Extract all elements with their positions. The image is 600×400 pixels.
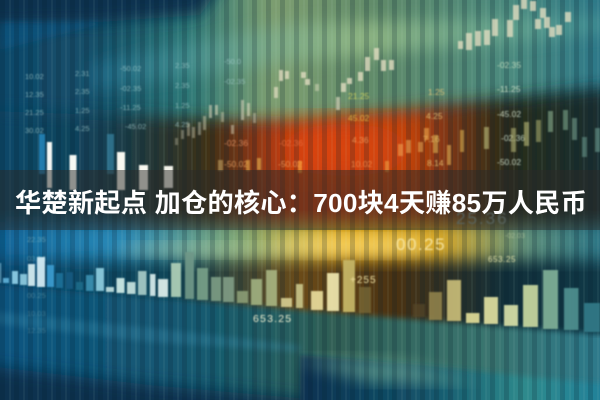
chart labels: floating numbers: 21.25 xyxy=(25,108,44,117)
title: 华楚新起点 加仓的核心：700块4天赚85万人民币 xyxy=(15,188,587,218)
chart labels: warm numbers: 4.25 xyxy=(426,111,443,121)
small candlesticks: rising series xyxy=(175,0,571,145)
numeric labels: lower chart: 653.25 xyxy=(253,313,292,325)
chart labels: warm numbers: -11.25 xyxy=(497,84,521,94)
title strip xyxy=(0,170,600,230)
chart labels: warm numbers: -50.02 xyxy=(497,157,521,167)
chart labels: warm numbers: -02.36 xyxy=(224,138,248,148)
chart labels: warm numbers: -02.36 xyxy=(279,138,303,148)
chart labels: warm numbers: -50.02 xyxy=(278,159,302,169)
chart labels: floating numbers: 12.35 xyxy=(27,326,46,335)
chart labels: floating numbers: -02.35 xyxy=(120,84,141,93)
chart labels: warm numbers: 1.25 xyxy=(428,87,445,97)
chart labels: floating numbers: 12.35 xyxy=(25,90,44,99)
chart labels: floating numbers xyxy=(25,57,245,335)
chart labels: warm numbers: 7.16 xyxy=(423,134,440,144)
numeric labels: lower chart: +255 xyxy=(350,275,377,286)
chart labels: floating numbers: 03.14 xyxy=(27,254,46,263)
chart labels: floating numbers: 4.25 xyxy=(175,120,190,129)
chart labels: floating numbers: -50.02 xyxy=(120,64,141,73)
chart labels: floating numbers: 4.25 xyxy=(75,124,90,133)
chart labels: warm numbers: 8.14 xyxy=(427,158,444,168)
numeric labels: lower chart: 00.25 xyxy=(396,235,446,254)
large candlesticks: dark panel right xyxy=(218,110,600,173)
chart labels: floating numbers: -50.0 xyxy=(224,57,241,66)
chart labels: floating numbers: 22.35 xyxy=(27,235,46,244)
chart labels: floating numbers: -11.25 xyxy=(120,103,141,112)
chart labels: floating numbers: -45.02 xyxy=(125,122,146,131)
chart labels: floating numbers: 2.35 xyxy=(75,87,90,96)
chart labels: warm numbers: 10.02 xyxy=(351,159,373,169)
chart labels: warm numbers: -02.36 xyxy=(501,133,525,143)
chart labels: floating numbers: 2.35 xyxy=(175,81,190,90)
numeric labels: lower chart xyxy=(253,209,525,325)
lower bar chart xyxy=(0,252,600,332)
numeric labels: lower chart: -02.03 xyxy=(505,233,525,240)
chart labels: floating numbers: 1.25 xyxy=(175,101,190,110)
chart labels: warm numbers xyxy=(224,60,525,169)
chart labels: warm numbers: -02.35 xyxy=(497,60,521,70)
chart labels: floating numbers: 10.03 xyxy=(27,309,46,318)
chart labels: floating numbers: 00.25 xyxy=(27,291,46,300)
numeric labels: lower chart: 25.36 xyxy=(456,209,509,228)
chart labels: floating numbers: -02.35 xyxy=(224,77,245,86)
chart labels: warm numbers: 21.25 xyxy=(348,91,370,101)
chart labels: warm numbers: -50.02 xyxy=(224,159,248,169)
chart labels: warm numbers: 4.36 xyxy=(352,135,369,145)
chart labels: warm numbers: -45.02 xyxy=(497,109,521,119)
numeric labels: lower chart: 653.25 xyxy=(488,255,516,264)
chart labels: floating numbers: 30.02 xyxy=(25,126,44,135)
chart labels: floating numbers: 2.31 xyxy=(75,69,90,78)
chart labels: floating numbers: 1.25 xyxy=(75,106,90,115)
chart labels: floating numbers: 10.02 xyxy=(25,72,44,81)
chart labels: floating numbers: 2.35 xyxy=(175,61,190,70)
white bars: upper left bar chart xyxy=(39,134,173,190)
chart labels: warm numbers: 45.02 xyxy=(348,113,370,123)
